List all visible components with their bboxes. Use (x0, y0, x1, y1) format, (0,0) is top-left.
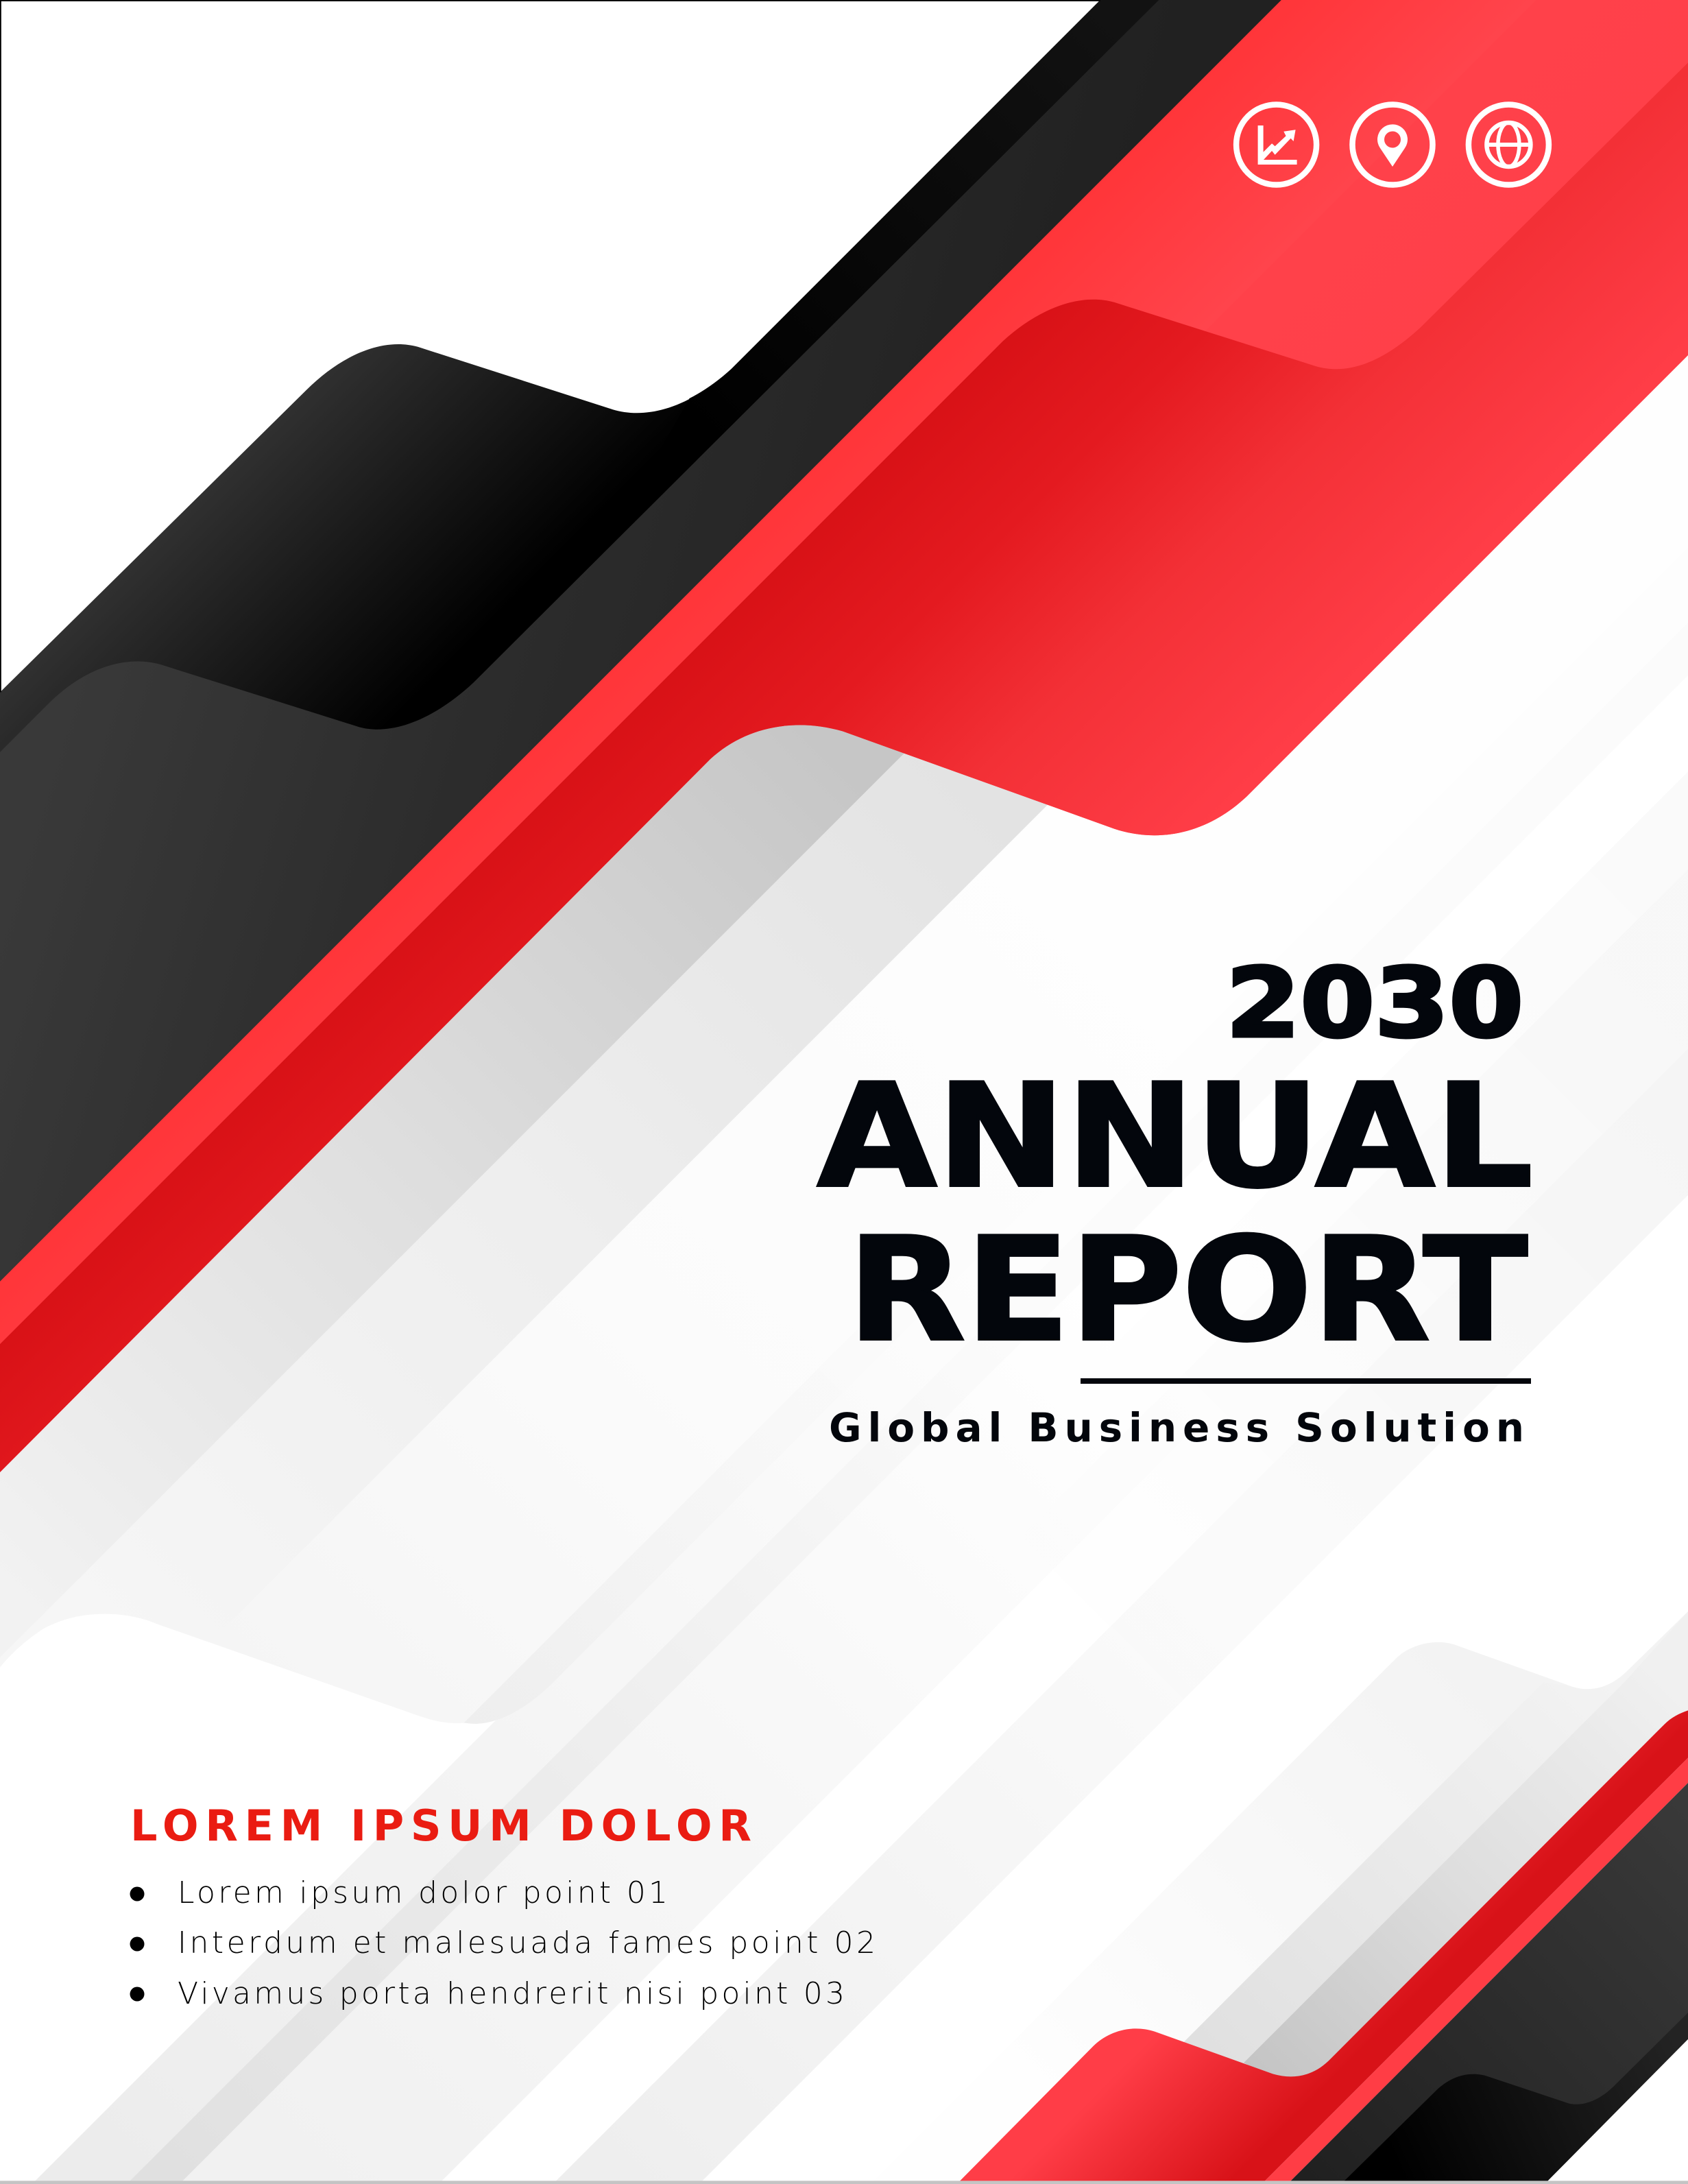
lower right red wave (960, 1710, 1688, 2181)
icon: globe (1469, 104, 1549, 185)
icon: location pin (1352, 104, 1433, 185)
mid grey band (344, 753, 1048, 1412)
list item 1: Lorem ipsum dolor point 01 (178, 1875, 668, 1910)
title: REPORT: REPORT (847, 1208, 1528, 1373)
thin black frame (1, 1, 1100, 693)
icon: growth chart (1236, 104, 1316, 185)
lower right red stripe (1264, 1757, 1688, 2181)
black strip (599, 0, 1159, 557)
bright red ribbon (0, 0, 1688, 1472)
bullet list (130, 1875, 876, 2011)
dark red gradient wave (0, 62, 1688, 1472)
title rule (1081, 1378, 1531, 1384)
list heading: LOREM IPSUM DOLOR (130, 1801, 751, 1851)
faint stripes lower left (32, 528, 1688, 2184)
strip inside wave (465, 1721, 468, 1723)
list item 3: Vivamus porta hendrerit nisi point 03 (178, 1976, 845, 2011)
lower right grey wave (871, 1611, 1688, 2184)
list item 2: Interdum et malesuada fames point 02 (178, 1925, 876, 1960)
bottom grey edge (0, 2181, 1688, 2184)
lower right dark grey band (1244, 1611, 1688, 2103)
dark grey band (0, 0, 1657, 1657)
subtitle: Global Business Solution (829, 1404, 1524, 1451)
lower right black wave (1344, 2013, 1688, 2181)
year heading: 2030 (1226, 948, 1523, 1059)
lower right dark band (1290, 1783, 1688, 2181)
black upper wave (0, 0, 1392, 1393)
lower right mid grey band (1184, 1611, 1688, 2117)
dark grey wave (0, 0, 1281, 1282)
title: ANNUAL: ANNUAL (817, 1054, 1533, 1220)
large grey wave shape (0, 0, 1688, 1724)
